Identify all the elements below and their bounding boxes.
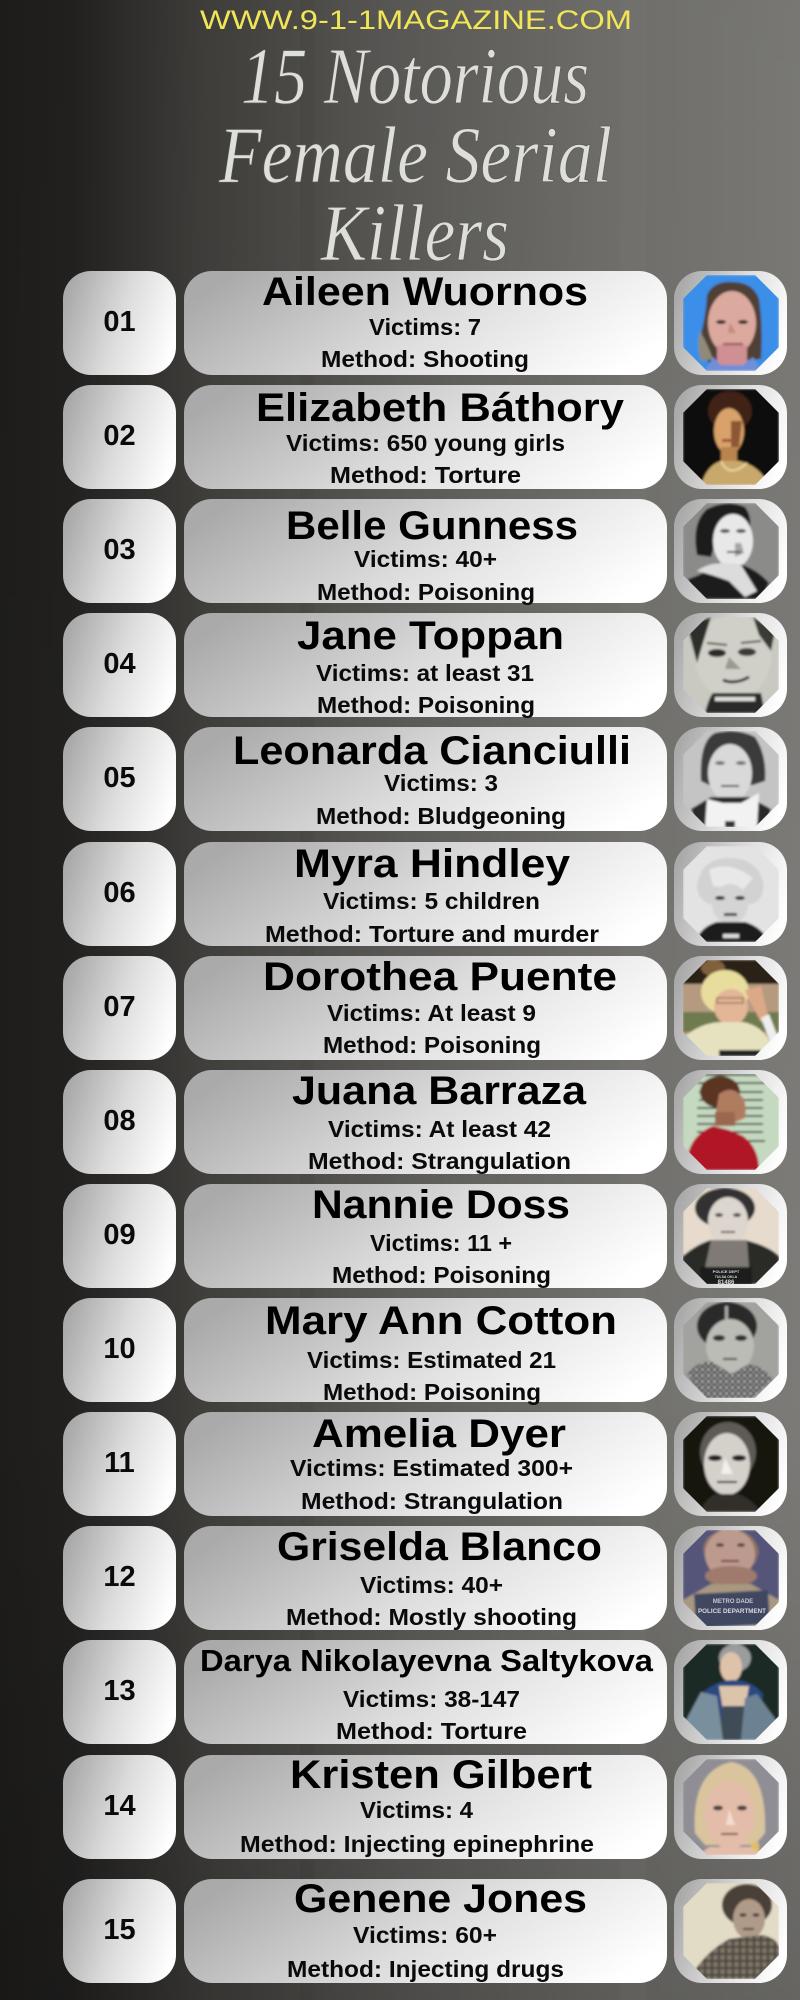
number badge 12: 12 [103,1561,136,1593]
number badge 12 [63,1526,176,1630]
portrait: Mary Ann Cotton [674,1298,787,1402]
name panel: Amelia Dyer: Victims: Estimated 300+ [290,1455,573,1481]
name panel: Myra Hindley [184,842,667,947]
name panel: Mary Ann Cotton: Victims: Estimated 21 [307,1347,556,1373]
row 13: Darya Nikolayevna Saltykova [63,1640,787,1744]
name panel: Kristen Gilbert: Method: Injecting epinephrine [240,1831,594,1857]
name panel: Mary Ann Cotton [184,1298,667,1405]
name panel: Genene Jones: Victims: 60+ [353,1922,497,1948]
number badge 02 [63,385,176,489]
name panel: Darya Nikolayevna Saltykova [184,1640,667,1744]
name panel: Myra Hindley: Method: Torture and murder [265,921,599,947]
number badge 06: 06 [103,877,136,909]
name panel: Belle Gunness [184,499,667,605]
name panel: Juana Barraza: Juana Barraza [292,1069,587,1113]
row 14: Kristen Gilbert [63,1753,787,1859]
row 15: Genene Jones [63,1877,787,1983]
name panel: Kristen Gilbert [184,1753,667,1859]
number badge 09: 09 [103,1219,136,1251]
name panel: Jane Toppan: Jane Toppan [297,614,564,658]
row 02: Elizabeth Báthory [63,385,787,489]
name panel: Dorothea Puente: Victims: At least 9 [327,1000,536,1026]
portrait: Belle Gunness [674,499,787,603]
name panel: Nannie Doss: Victims: 11 + [370,1230,512,1256]
name panel: Leonarda Cianciulli: Victims: 3 [384,770,498,796]
name panel: Mary Ann Cotton: Method: Poisoning [323,1379,541,1405]
number badge 06 [63,842,176,946]
name panel: Juana Barraza: Victims: At least 42 [328,1116,551,1142]
portrait: Juana Barraza [674,1070,787,1174]
title: Female Serial [218,112,612,200]
portrait: Griselda Blanco [674,1526,787,1630]
name panel: Kristen Gilbert: Kristen Gilbert [290,1753,592,1797]
number badge 01 [63,271,176,375]
name panel: Griselda Blanco: Victims: 40+ [360,1572,503,1598]
name panel: Aileen Wuornos: Victims: 7 [369,314,481,340]
number badge 11 [63,1412,176,1516]
name panel: Belle Gunness: Victims: 40+ [354,546,497,572]
number badge 11: 11 [104,1447,135,1479]
name panel: Jane Toppan: Victims: at least 31 [316,660,534,686]
name panel: Amelia Dyer: Amelia Dyer [312,1412,566,1456]
name panel: Elizabeth Báthory: Elizabeth Báthory [256,386,625,430]
row 04: Jane Toppan [63,613,787,718]
name panel: Myra Hindley: Victims: 5 children [323,888,540,914]
portrait: Darya Nikolayevna Saltykova [674,1640,787,1744]
name panel: Belle Gunness: Belle Gunness [286,504,578,548]
row 05: Leonarda Cianciulli [63,727,787,831]
name panel: Juana Barraza [184,1069,667,1174]
number badge 05 [63,727,176,831]
portrait: Aileen Wuornos [674,271,787,375]
name panel: Genene Jones [184,1877,667,1983]
number badge 15 [63,1879,176,1983]
name panel: Mary Ann Cotton: Mary Ann Cotton [265,1299,617,1343]
number badge 13 [63,1640,176,1744]
name panel: Dorothea Puente: Method: Poisoning [323,1032,541,1058]
portrait: Amelia Dyer [674,1412,787,1516]
number badge 04: 04 [103,648,136,680]
name panel: Elizabeth Báthory: Method: Torture [330,462,521,488]
number badge 07: 07 [103,991,136,1023]
title: Killers [320,190,509,278]
name panel: Myra Hindley: Myra Hindley [294,842,571,886]
number badge 10 [63,1298,176,1402]
portrait: Griselda Blanco: METRO DADE [713,1599,753,1605]
portrait: Griselda Blanco: POLICE DEPARTMENT [698,1609,766,1615]
row 12: Griselda Blanco [63,1525,787,1630]
name panel: Genene Jones: Genene Jones [294,1877,587,1921]
row 03: Belle Gunness [63,499,787,605]
number badge 08 [63,1070,176,1174]
name panel: Belle Gunness: Method: Poisoning [317,579,535,605]
name panel: Darya Nikolayevna Saltykova: Darya Nikolayevna Saltykova [200,1643,654,1678]
name panel: Kristen Gilbert: Victims: 4 [360,1797,473,1823]
portrait: Kristen Gilbert [674,1755,787,1859]
name panel: Darya Nikolayevna Saltykova: Method: Torture [336,1718,527,1744]
number badge 03 [63,499,176,603]
name panel: Aileen Wuornos: Method: Shooting [321,346,529,372]
row 07: Dorothea Puente [63,955,787,1060]
name panel: Griselda Blanco: Griselda Blanco [277,1525,602,1569]
name panel: Elizabeth Báthory [184,385,667,489]
name panel: Leonarda Cianciulli [184,727,667,831]
name panel: Amelia Dyer: Method: Strangulation [301,1488,563,1514]
name panel: Leonarda Cianciulli: Method: Bludgeoning [316,803,566,829]
portrait: Dorothea Puente [674,956,787,1060]
name panel: Aileen Wuornos [184,270,667,375]
name panel: Griselda Blanco: Method: Mostly shooting [286,1604,577,1630]
name panel: Jane Toppan [184,613,667,718]
portrait: Nannie Doss: TULSA OKLA [715,1275,738,1279]
number badge 10: 10 [103,1333,136,1365]
portrait: Nannie Doss [674,1184,787,1288]
name panel: Amelia Dyer [184,1412,667,1516]
number badge 04 [63,613,176,717]
portrait: Genene Jones [674,1879,787,1983]
portrait: Leonarda Cianciulli [674,727,787,831]
row 10: Mary Ann Cotton [63,1298,787,1405]
name panel: Genene Jones: Method: Injecting drugs [287,1956,564,1982]
name panel: Dorothea Puente [184,955,667,1060]
website url: WWW.9-1-1MAGAZINE.COM [200,5,632,35]
name panel: Nannie Doss: Nannie Doss [312,1183,570,1227]
number badge 08: 08 [103,1105,136,1137]
row 11: Amelia Dyer [63,1412,787,1516]
number badge 05: 05 [103,762,136,794]
number badge 14 [63,1755,176,1859]
title: 15 Notorious [241,33,589,121]
name panel: Leonarda Cianciulli: Leonarda Cianciulli [233,729,631,773]
number badge 03: 03 [103,534,136,566]
row 01: Aileen Wuornos [63,270,787,375]
name panel: Juana Barraza: Method: Strangulation [308,1148,571,1174]
portrait: Nannie Doss: 81486 [718,1280,735,1286]
number badge 14: 14 [103,1790,136,1822]
title [218,33,612,278]
number badge 13: 13 [103,1675,136,1707]
name panel: Jane Toppan: Method: Poisoning [317,692,535,718]
number badge 01: 01 [103,306,136,338]
name panel: Elizabeth Báthory: Victims: 650 young girls [286,430,565,456]
name panel: Nannie Doss: Method: Poisoning [332,1262,551,1288]
portrait: Myra Hindley [674,842,787,946]
number badge 09 [63,1184,176,1288]
name panel: Aileen Wuornos: Aileen Wuornos [262,270,588,314]
name panel: Dorothea Puente: Dorothea Puente [263,955,617,999]
row 06: Myra Hindley [63,842,787,947]
name panel: Nannie Doss [184,1183,667,1288]
row 08: Juana Barraza [63,1069,787,1174]
number badge 15: 15 [103,1914,136,1946]
number badge 07 [63,956,176,1060]
row 09: Nannie Doss [63,1183,787,1288]
portrait: Elizabeth Báthory [674,385,787,489]
portrait: Nannie Doss: POLICE DEPT [713,1269,740,1274]
portrait: Jane Toppan [674,613,787,717]
name panel: Darya Nikolayevna Saltykova: Victims: 38-147 [343,1686,520,1712]
name panel: Griselda Blanco [184,1525,667,1630]
number badge 02: 02 [103,420,136,452]
